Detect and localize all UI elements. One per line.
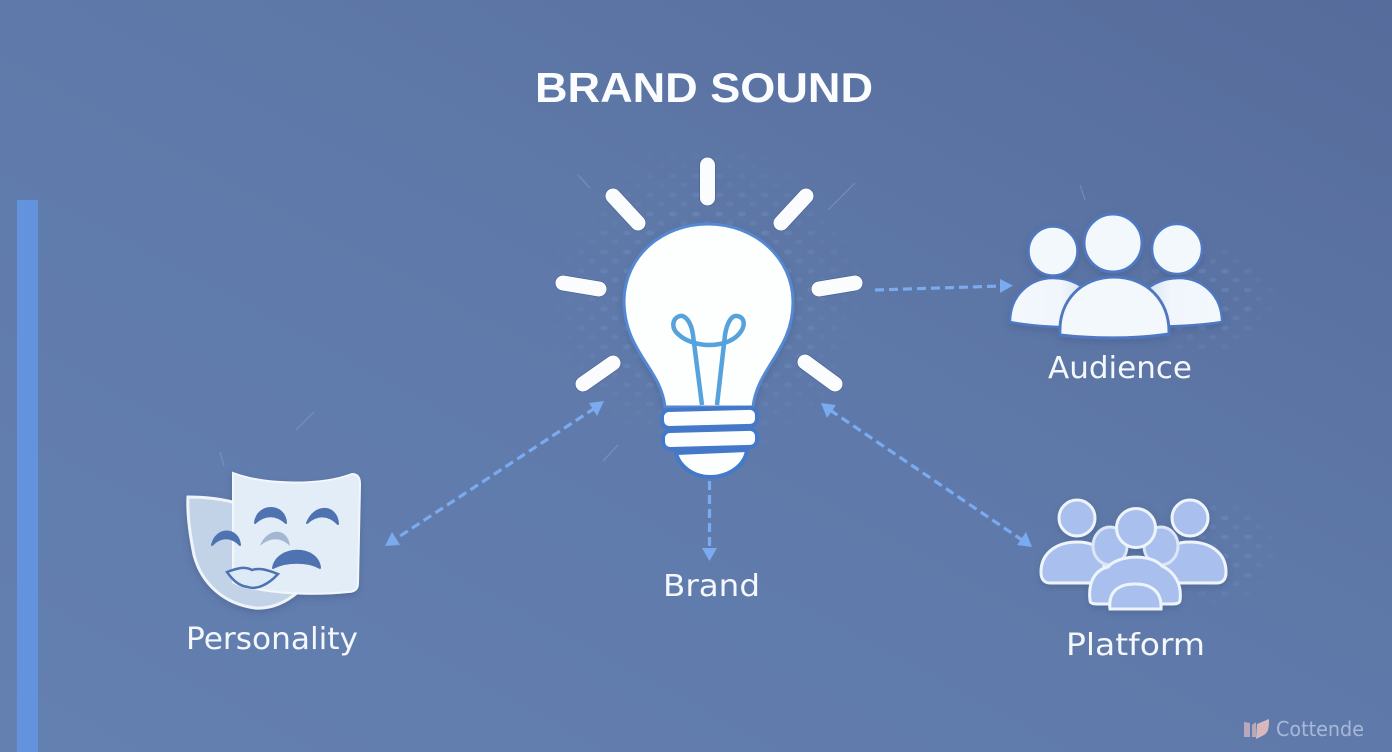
icon: light bulb [563, 165, 855, 477]
halftone glow around bulb [603, 193, 814, 387]
bulb glass [624, 224, 793, 407]
label: personality: Personality [186, 622, 358, 657]
filament [673, 316, 744, 405]
mask lips [227, 568, 278, 588]
icon: theater masks [188, 473, 360, 608]
mask features [212, 508, 338, 568]
arrow: bulb to brand label [702, 481, 717, 561]
halftone near audience [1176, 268, 1252, 336]
icon: audience people [1010, 214, 1222, 338]
arrow: bulb to personality [385, 401, 604, 546]
label: brand: Brand [663, 569, 760, 604]
back mask [188, 497, 298, 608]
mask nose [260, 532, 290, 546]
icon: logo book [1244, 722, 1250, 737]
label: platform: Platform [1066, 628, 1205, 663]
halftone near platform [1199, 516, 1252, 577]
watermark: Cottende [1276, 717, 1364, 741]
arrow: bulb to audience [875, 279, 1013, 293]
title: BRAND SOUND [535, 64, 873, 111]
bulb base bands [662, 408, 757, 477]
front mask [233, 473, 360, 594]
light rays [563, 165, 855, 384]
label: audience: Audience [1048, 351, 1192, 386]
arrow: bulb to platform [821, 403, 1032, 547]
left accent bar [17, 200, 38, 752]
icon: platform people [1041, 500, 1226, 609]
